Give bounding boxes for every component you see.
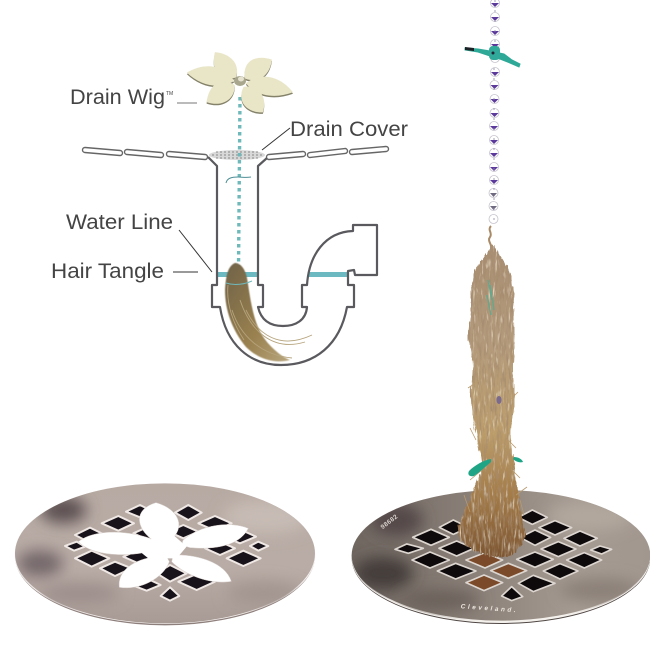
right drain metal plate: [352, 490, 650, 624]
small teal hook: [226, 177, 251, 183]
label: Drain Cover: Drain Cover: [290, 118, 408, 141]
left drain metal plate: [15, 483, 315, 625]
teal dotted wig line: [238, 97, 240, 325]
hair tangle in pipe: [225, 263, 312, 361]
panel: clean drain cover with flower: [15, 483, 315, 625]
pulled hair clump: [458, 245, 527, 557]
left drain grate openings: [65, 505, 268, 601]
drain engraved model text: 98682: [380, 513, 399, 531]
label: Water Line: Water Line: [66, 211, 173, 234]
label: Drain Wig: TM: [166, 91, 173, 97]
icon: green petals on hair: [468, 457, 523, 476]
label: Drain Wig: Drain Wig: [70, 86, 165, 109]
panel: drain with pulled hair: [352, 490, 650, 624]
drain brand text Cleveland: Cleveland.: [461, 603, 516, 614]
label: Hair Tangle: Hair Tangle: [51, 260, 164, 283]
drain cover: [209, 150, 265, 160]
label: Water Line: [66, 211, 212, 272]
P-trap pipe outline: [208, 157, 377, 365]
floor line with segments: [85, 149, 386, 157]
right drain grate openings: [395, 510, 612, 601]
label: Drain Cover: [262, 118, 408, 150]
white flower on drain: [78, 503, 248, 588]
bead chain: [489, 0, 500, 248]
icon: Drain Wig flower: [185, 47, 295, 120]
icon: green wig clip on chain: [465, 46, 520, 67]
water level bands: [217, 272, 347, 277]
